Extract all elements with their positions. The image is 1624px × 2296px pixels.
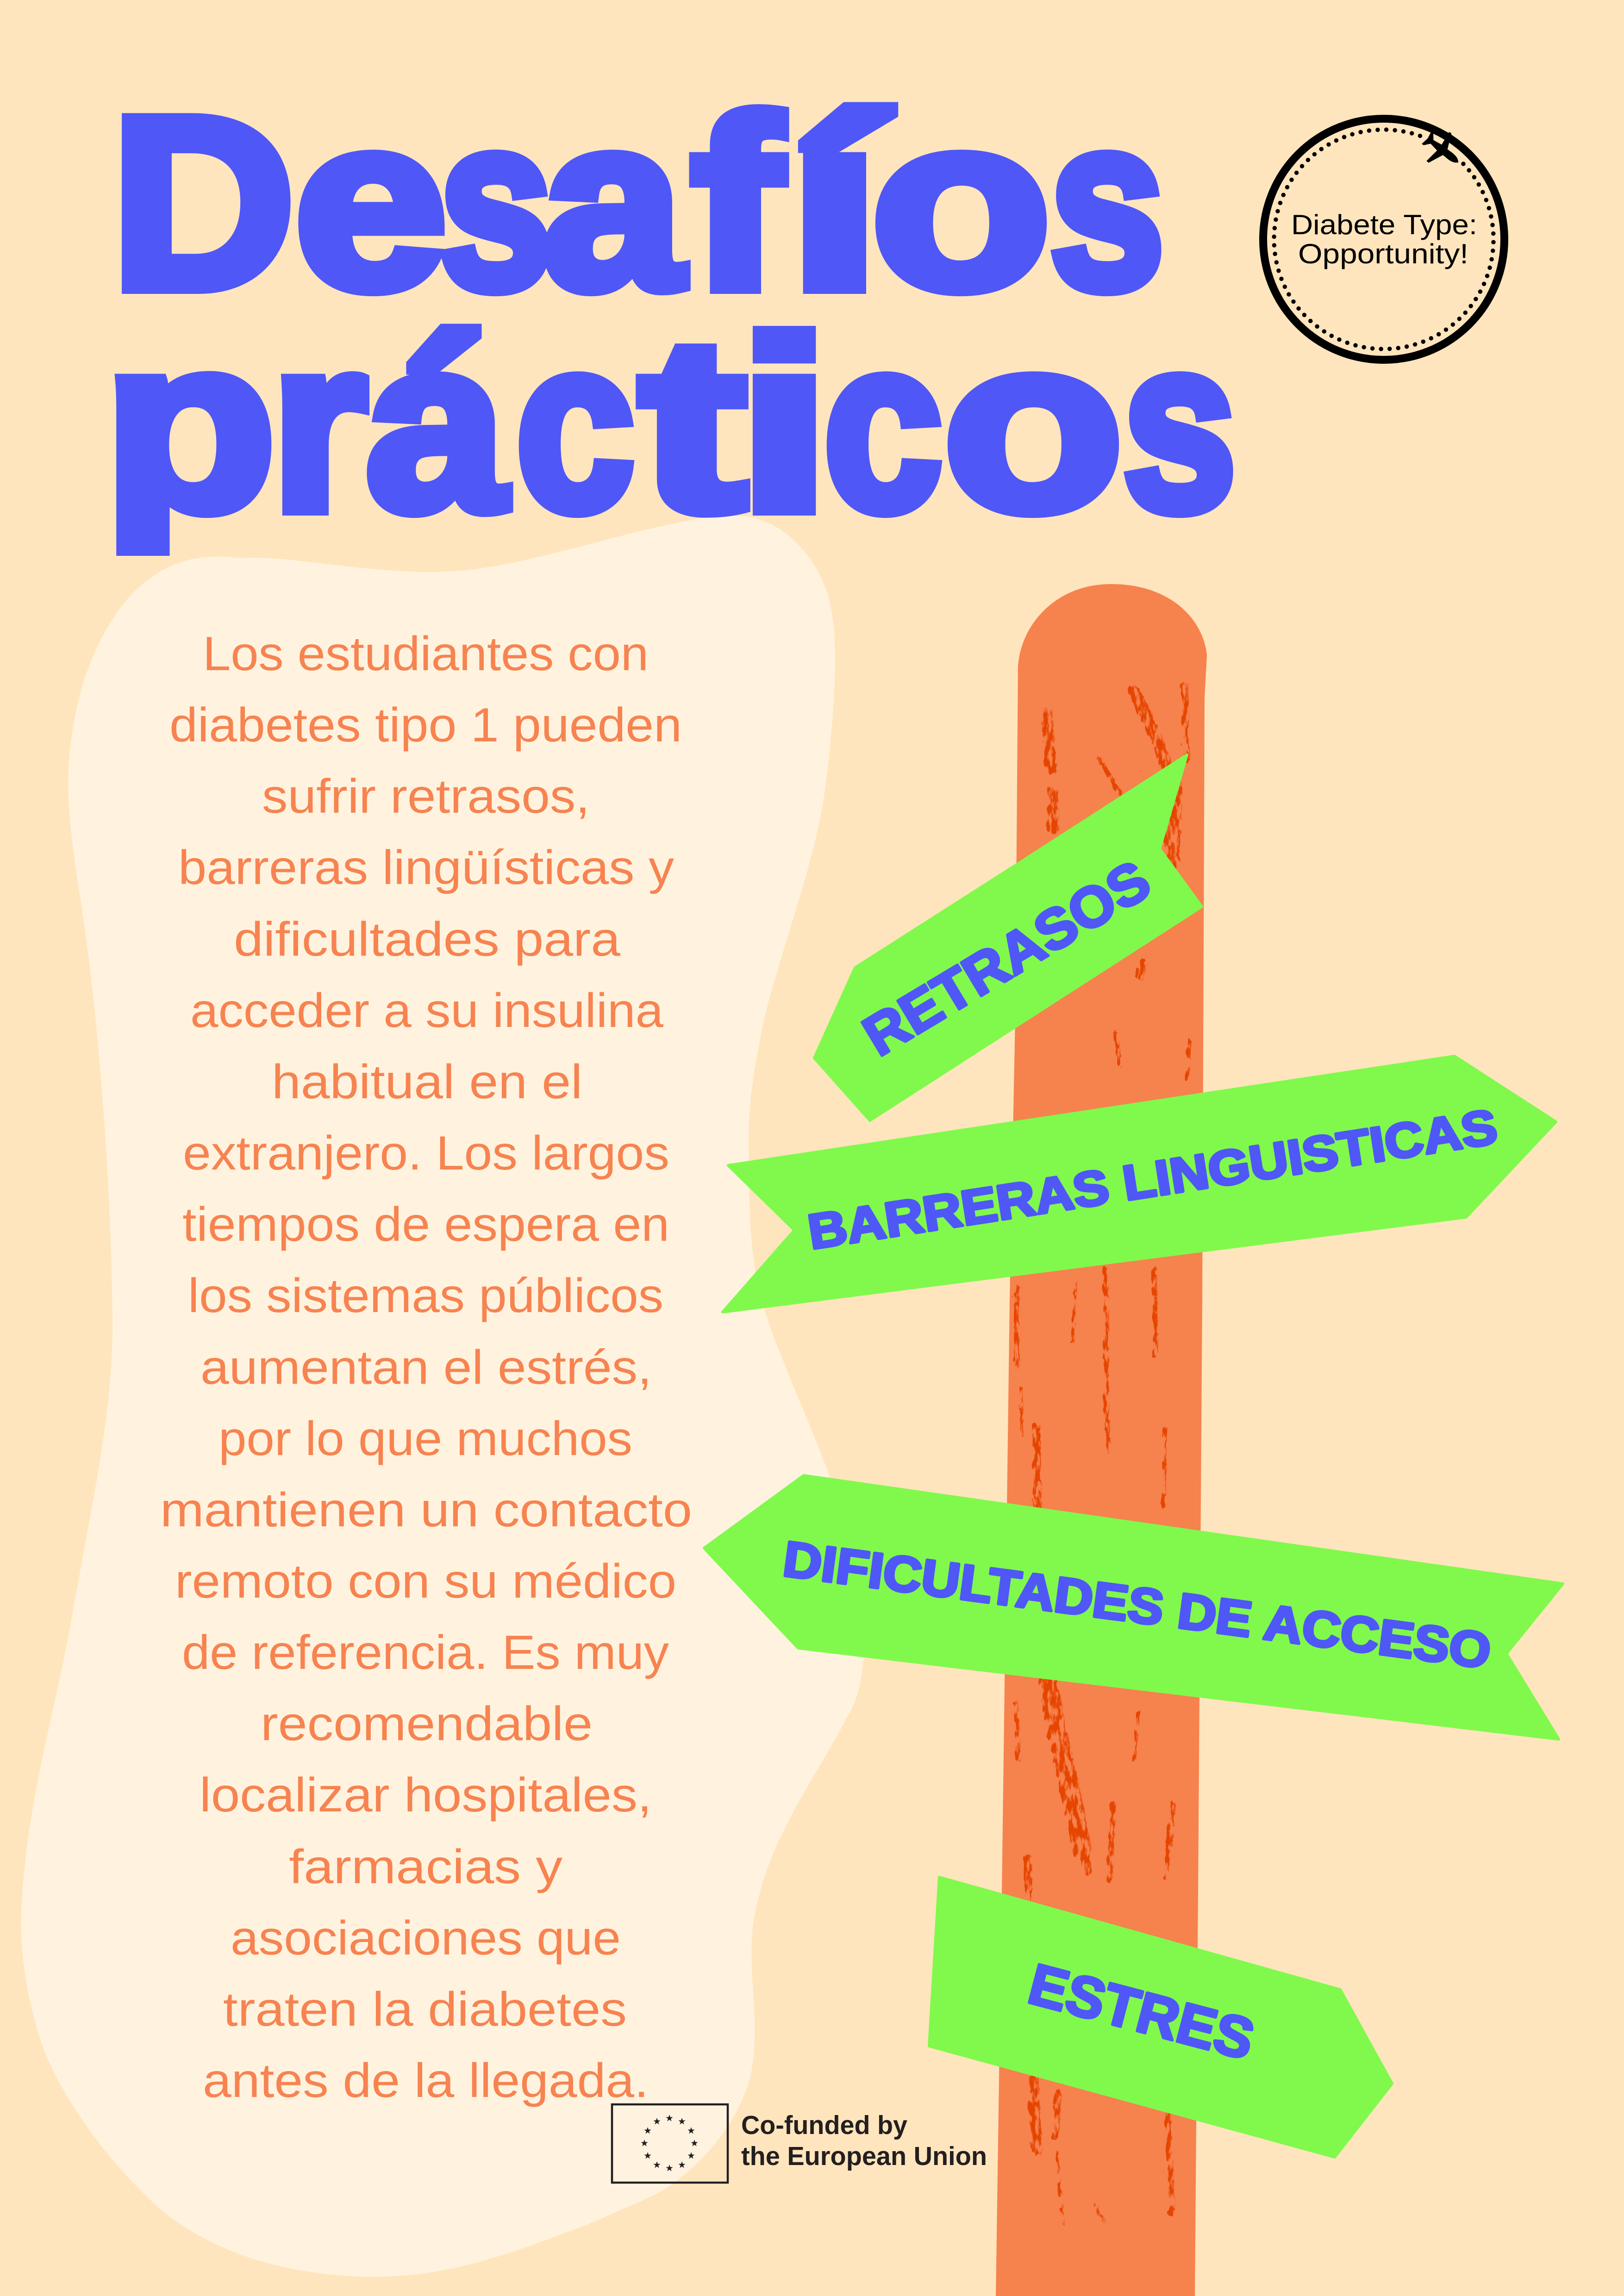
body text: Los estudiantes con — [203, 627, 649, 681]
body text: asociaciones que — [231, 1911, 621, 1965]
badge: Diabete Type Opportunity — [1263, 118, 1505, 360]
pole wood grain — [1016, 685, 1190, 2224]
body text: habitual en el — [272, 1055, 582, 1109]
logo text: the European Union — [741, 2141, 987, 2171]
body text: mantienen un contacto — [160, 1483, 692, 1537]
title line 2 — [114, 324, 1233, 556]
body text: farmacias y — [289, 1840, 562, 1894]
body text: por lo que muchos — [219, 1412, 632, 1466]
badge text: Diabete Type: — [1291, 209, 1477, 240]
icon: EU flag — [612, 2104, 728, 2183]
title line 1: s — [439, 67, 552, 339]
body text: recomendable — [261, 1697, 593, 1751]
title — [104, 67, 1236, 562]
body text: de referencia. Es muy — [182, 1626, 669, 1680]
sign shape — [814, 755, 1202, 1120]
sign: dificultades de acceso — [704, 1475, 1563, 1739]
title line 2: p — [104, 288, 275, 562]
icon: airplane — [1415, 123, 1470, 177]
title line 1: o — [872, 67, 1050, 339]
logo text: Co-funded by — [741, 2110, 907, 2140]
badge dotted ring — [1274, 130, 1493, 349]
sign shape — [929, 1877, 1392, 2157]
title line 1: D — [112, 67, 294, 339]
logo text — [741, 2110, 987, 2171]
logo: co-funded by the European Union — [612, 2104, 987, 2183]
title line 2: o — [944, 288, 1123, 561]
title line 1: í — [788, 67, 892, 339]
body text: tiempos de espera en — [182, 1198, 669, 1251]
title line 1: s — [1050, 67, 1164, 339]
badge: Diabete Type Opportunity: Opportunity! — [1298, 238, 1468, 269]
body text: localizar hospitales, — [200, 1768, 652, 1822]
body text: barreras lingüísticas y — [178, 841, 674, 895]
body text: antes de la llegada. — [203, 2054, 649, 2108]
title line 2: s — [1123, 288, 1236, 561]
sign label: DIFICULTADES DE ACCESO — [780, 1531, 1494, 1679]
badge outer ring — [1263, 118, 1505, 360]
signpost pole — [996, 584, 1207, 2296]
body text: extranjero. Los largos — [183, 1126, 669, 1180]
title line 1: f — [692, 67, 784, 339]
title line 2: i — [738, 288, 831, 561]
sign: estres — [929, 1877, 1392, 2157]
sign: barreras linguisticas — [723, 1056, 1556, 1312]
sign shape — [723, 1056, 1556, 1312]
body text — [160, 627, 692, 2108]
sign label: BARRERAS LINGUISTICAS — [804, 1099, 1501, 1260]
sign: retrasos — [814, 755, 1202, 1120]
title line 2: t — [640, 288, 746, 561]
body text: los sistemas públicos — [188, 1269, 663, 1323]
sign label: ESTRES — [1022, 1952, 1261, 2072]
body text: sufrir retrasos, — [262, 770, 590, 823]
sign shape — [704, 1475, 1563, 1739]
body text: diabetes tipo 1 pueden — [169, 698, 682, 752]
title line 1: a — [543, 67, 684, 339]
body text: remoto con su médico — [175, 1555, 676, 1608]
panel: pale blob behind body text — [21, 516, 866, 2277]
title line 2: c — [824, 288, 942, 561]
title line 2: c — [516, 288, 634, 561]
title line 1: e — [295, 67, 447, 339]
body text: traten la diabetes — [223, 1983, 627, 2036]
title line 2: r — [272, 288, 367, 561]
body text: dificultades para — [234, 913, 620, 966]
body text: acceder a su insulina — [190, 984, 663, 1038]
sign label: RETRASOS — [852, 848, 1161, 1068]
body text: aumentan el estrés, — [200, 1341, 652, 1394]
pole body — [996, 584, 1207, 2296]
title line 2: á — [367, 288, 507, 561]
